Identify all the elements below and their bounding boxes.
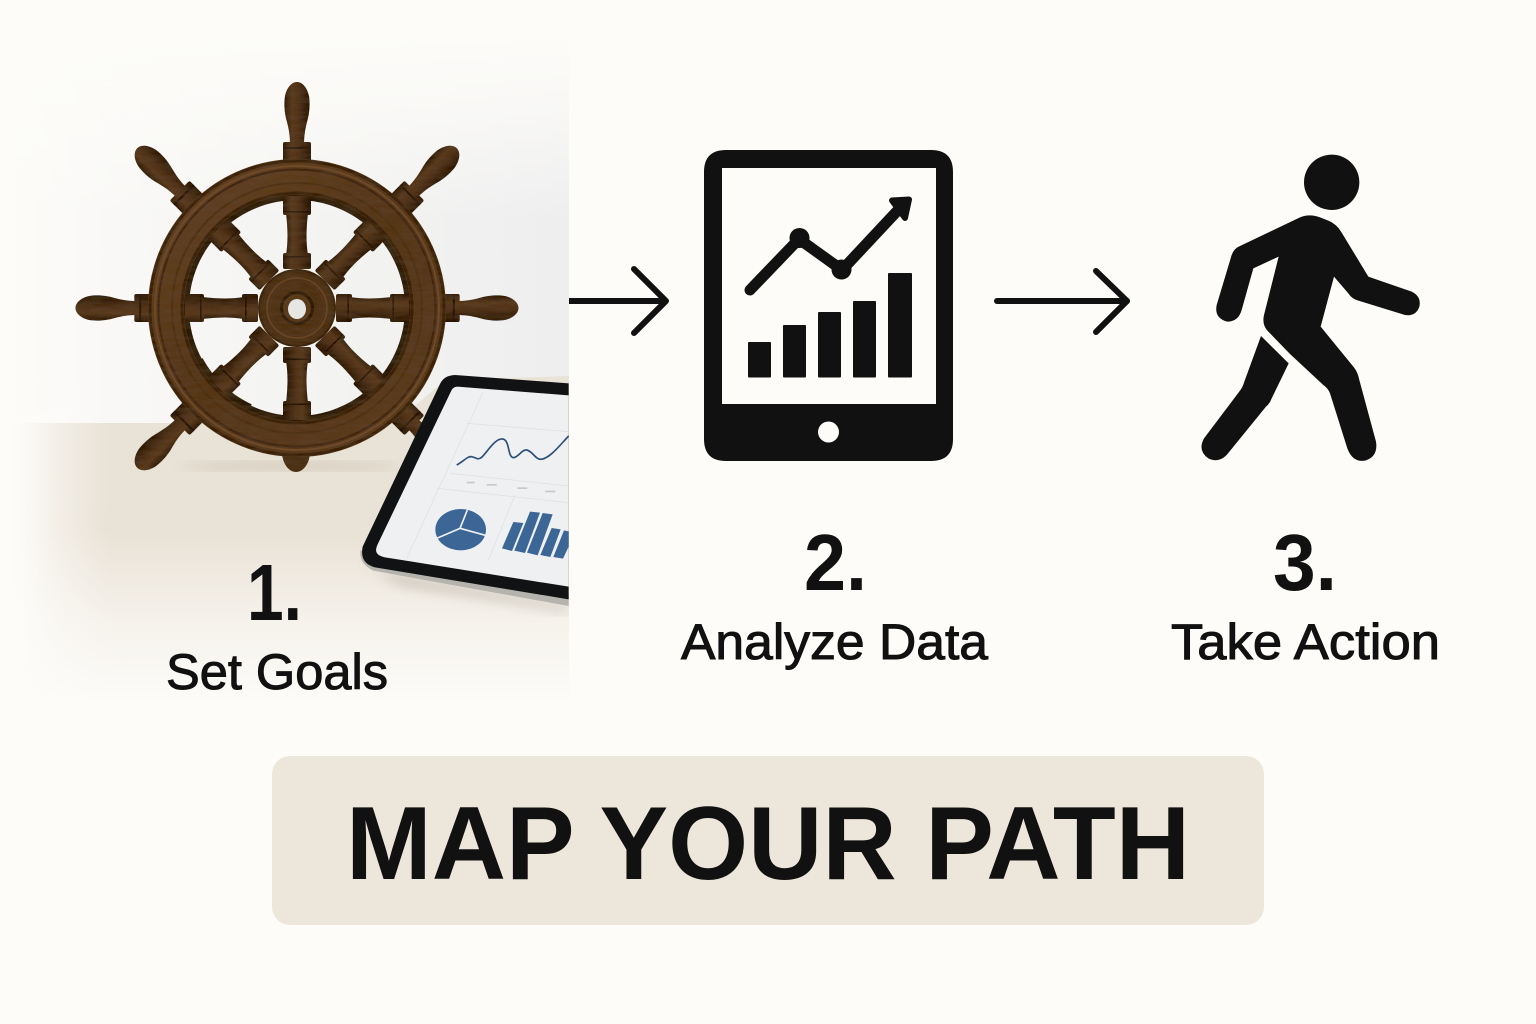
chart axis labels — [467, 482, 555, 492]
tablet shadow on desk — [382, 572, 569, 615]
wheel handles — [76, 82, 518, 478]
tablet screen — [376, 387, 569, 587]
step 3 label — [1171, 518, 1440, 670]
arrow: step 2 to step 3 — [997, 271, 1127, 332]
tablet black bezel — [362, 375, 569, 599]
wheel hub — [258, 269, 336, 347]
number 2: 2. — [804, 518, 867, 607]
tablet silver edge — [360, 550, 569, 606]
caption: Set Goals: Set Goals — [166, 644, 388, 700]
bar chart — [748, 273, 912, 378]
dashboard grid lines — [407, 392, 569, 560]
step 2 label — [681, 518, 988, 670]
bar chart — [502, 512, 569, 559]
icon: walking person — [1201, 155, 1420, 461]
number 3: 3. — [1273, 518, 1337, 607]
wheel contact shadow — [180, 461, 400, 471]
photo desk surface — [36, 376, 569, 654]
step 1 label — [166, 548, 388, 700]
banner: Map Your Path — [272, 756, 1264, 925]
photo wall backdrop — [253, 145, 569, 415]
caption: Analyze Data: Analyze Data — [681, 614, 988, 670]
wheel rim — [150, 161, 444, 455]
icon: ship's wheel — [76, 82, 518, 478]
caption: Take Action: Take Action — [1171, 614, 1440, 670]
icon: tablet photo with dashboard — [360, 375, 569, 606]
arrow: step 1 to step 2 — [569, 269, 666, 333]
torso, arms and front leg — [1216, 215, 1420, 461]
wheel hub pearl centre — [288, 299, 306, 319]
panel: photo of ship wheel and tablet on desk — [36, 82, 569, 654]
trend line with arrow — [750, 200, 909, 290]
head — [1304, 155, 1359, 210]
back leg — [1201, 336, 1289, 460]
banner title: MAP YOUR PATH — [346, 786, 1190, 902]
tablet body — [704, 150, 953, 461]
number 1: 1. — [247, 548, 302, 637]
icon: tablet with growth chart — [704, 150, 953, 461]
wheel spokes — [185, 196, 409, 420]
banner background — [272, 756, 1264, 925]
pie chart — [435, 509, 486, 550]
tablet home button — [818, 422, 839, 442]
wheel inner shadow ring — [185, 196, 409, 420]
line chart — [457, 436, 569, 465]
